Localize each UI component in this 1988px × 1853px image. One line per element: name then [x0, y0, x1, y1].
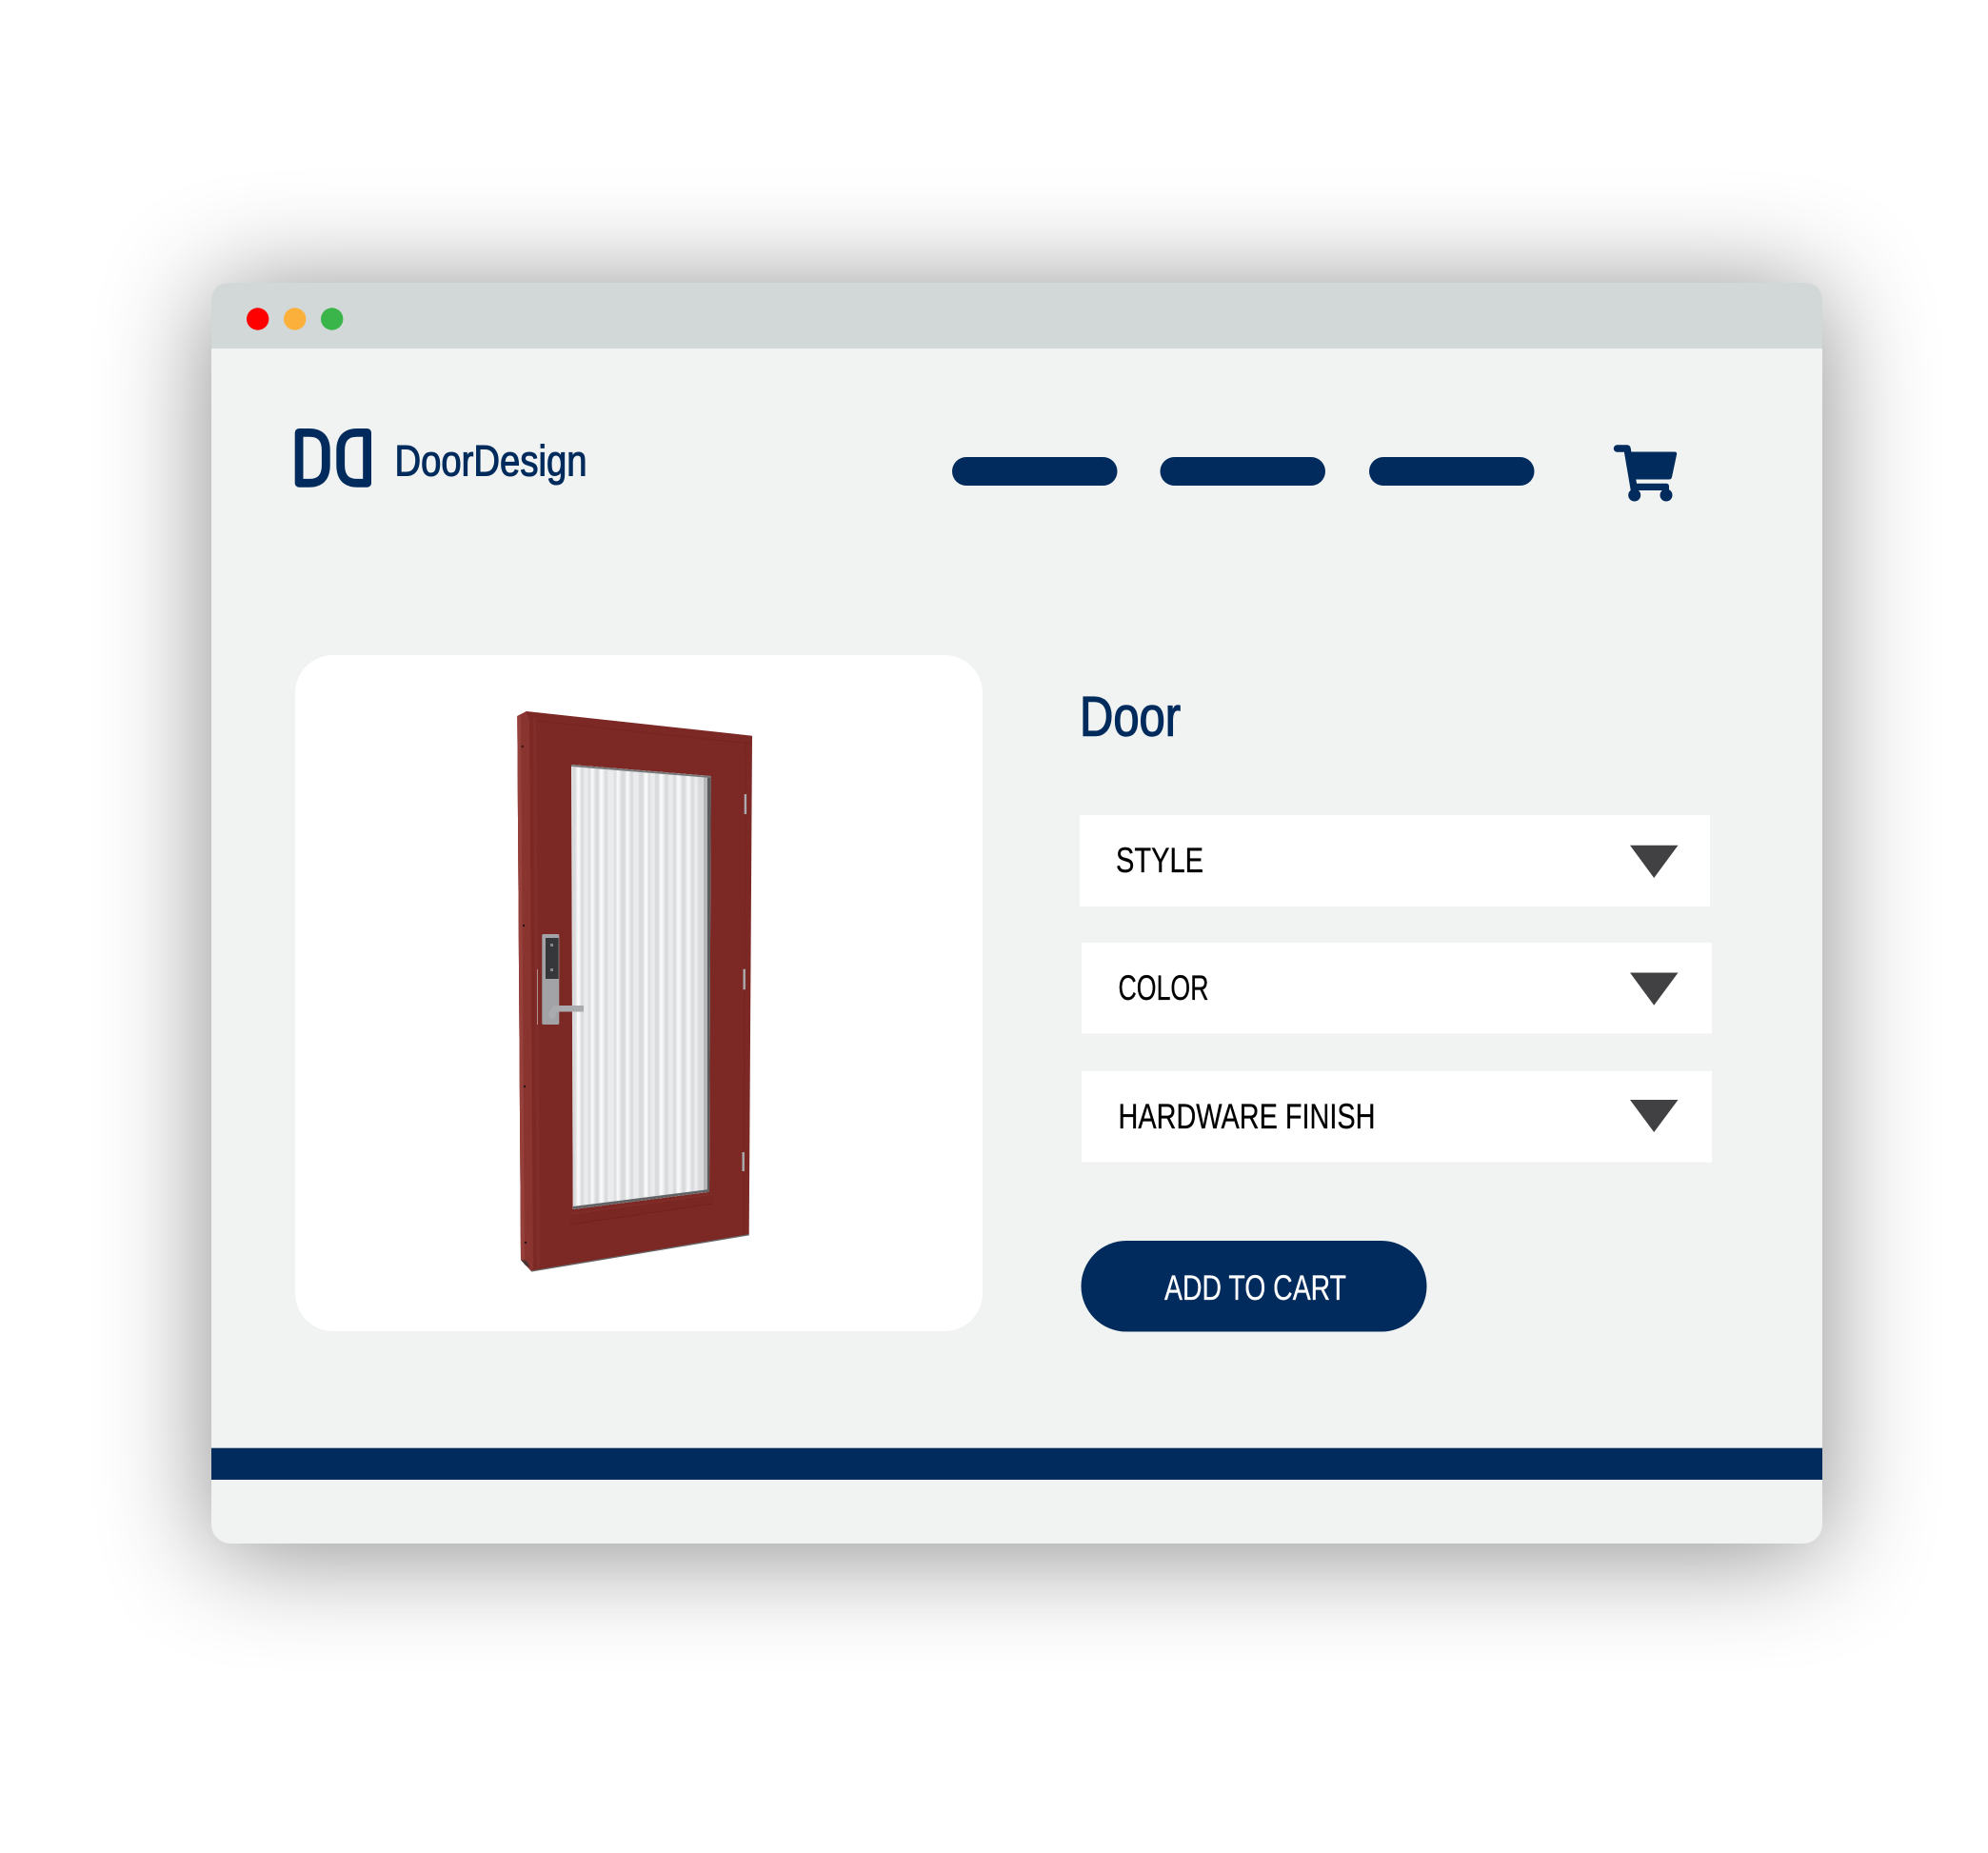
- door handle: [548, 1006, 584, 1019]
- add to cart button: [1082, 1241, 1426, 1331]
- logo: DD mark: [299, 432, 368, 483]
- door hinges: [743, 794, 746, 1171]
- dropdown: style: [1080, 815, 1710, 907]
- glazing sill: [570, 1194, 713, 1225]
- browser window background with shadow: [211, 283, 1822, 1544]
- door lock plate: [537, 934, 559, 1025]
- icon: shopping cart: [1617, 448, 1677, 501]
- door illustration: [517, 711, 752, 1271]
- door leaf: [517, 711, 752, 1271]
- glass panel: [569, 762, 712, 1211]
- bottom edge: [531, 1235, 749, 1271]
- dropdown: hardware finish: [1082, 1071, 1712, 1162]
- logo wordmark: DoorDesign: [394, 436, 586, 486]
- navigation placeholder pills: [952, 457, 1535, 486]
- dropdown: color: [1082, 943, 1712, 1034]
- door edge screws: [522, 746, 527, 1244]
- dropdown: style: STYLE: [1116, 841, 1203, 880]
- panel: product image card: [295, 655, 983, 1331]
- door bevel lines: [536, 721, 750, 744]
- browser title bar: [211, 283, 1822, 349]
- add to cart button: ADD TO CART: [1164, 1268, 1346, 1307]
- browser window contents: [211, 283, 1822, 1480]
- product title: Door: [1080, 686, 1181, 748]
- door side edge: [517, 711, 533, 1271]
- footer band: [211, 1448, 1822, 1480]
- glass frame shading: [704, 762, 707, 1211]
- dropdown: hardware finish: HARDWARE FINISH: [1118, 1097, 1375, 1136]
- dropdown: color: COLOR: [1118, 968, 1209, 1007]
- window control dots: [247, 308, 343, 330]
